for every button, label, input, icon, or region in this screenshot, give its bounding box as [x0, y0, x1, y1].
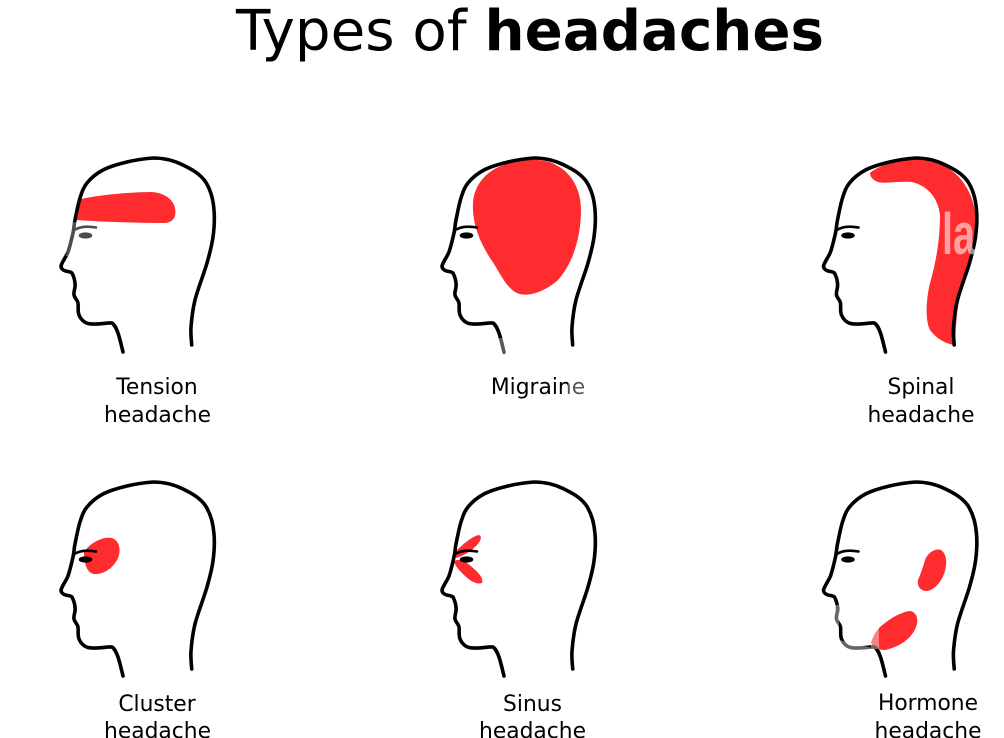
- label: Sinus: [503, 692, 562, 717]
- panel: cluster headache: [61, 482, 214, 738]
- label: headache: [104, 403, 211, 428]
- label: Migraine: [491, 375, 585, 400]
- label: Hormone: [878, 691, 978, 716]
- panel: spinal headache: [824, 158, 977, 428]
- panel: migraine: [442, 158, 595, 400]
- label: headache: [868, 403, 974, 428]
- panel: hormone headache: [824, 482, 981, 738]
- pain area: sinus petals: [454, 535, 482, 584]
- panel: sinus headache: [442, 482, 595, 738]
- head profile: [442, 158, 595, 352]
- watermark residue: [499, 338, 586, 398]
- head profile: [61, 482, 214, 676]
- head profile: [824, 158, 977, 352]
- pain area: forehead band: [76, 192, 175, 223]
- head profile: [442, 482, 595, 676]
- pain area: side of head: [473, 160, 581, 295]
- label: Spinal: [888, 375, 954, 400]
- watermark residue: [833, 605, 879, 660]
- head profile: [824, 482, 977, 676]
- head profile: [61, 158, 214, 352]
- watermark residue: [66, 222, 100, 256]
- pain area: jaw: [871, 611, 917, 650]
- pain area: temple: [918, 549, 946, 591]
- pain area: around eye: [84, 538, 120, 574]
- pain area: top and back of head: [870, 159, 976, 345]
- label: Cluster: [118, 692, 196, 717]
- panel: tension headache: [61, 158, 214, 428]
- watermark residue: la: [942, 202, 976, 267]
- label: Tension: [116, 375, 198, 400]
- title: Types of headaches: [235, 0, 824, 64]
